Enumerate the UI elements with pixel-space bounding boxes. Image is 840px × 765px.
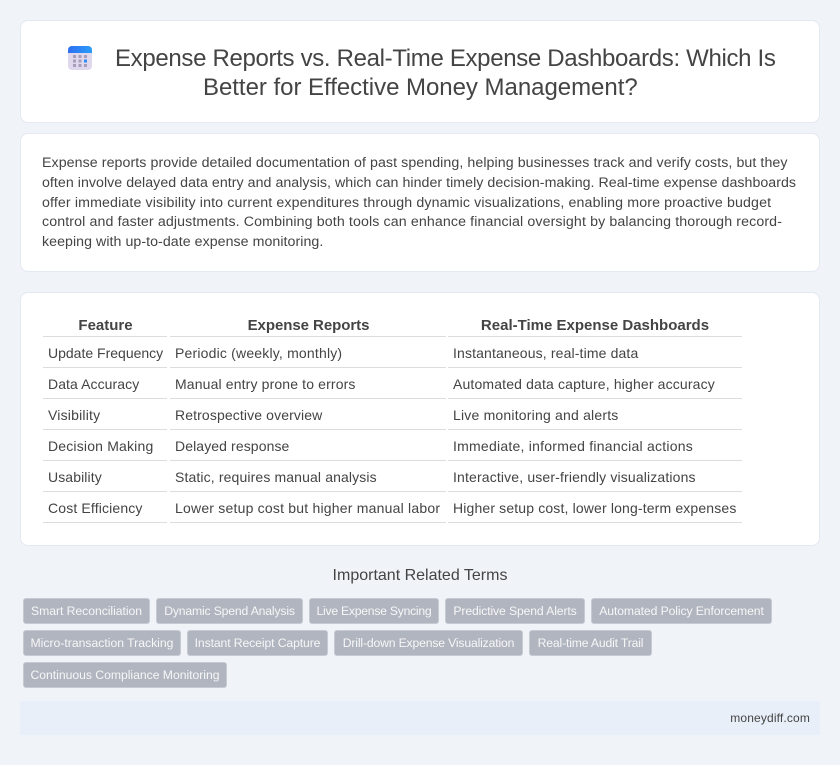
table rows: Lower setup cost but higher manual labor bbox=[175, 500, 440, 516]
footer source: moneydiff.com bbox=[730, 711, 810, 725]
summary text: offer immediate visibility into current expenditures through dynamic visualizations, enabling more proactive budget bbox=[42, 195, 771, 211]
table rows: Higher setup cost, lower long-term expenses bbox=[453, 500, 736, 516]
table rows: Cost Efficiency bbox=[48, 500, 143, 516]
table rows: Delayed response bbox=[175, 438, 289, 454]
table header: Expense Reports bbox=[248, 317, 369, 334]
table rows: Periodic (weekly, monthly) bbox=[175, 345, 342, 361]
related terms tags: Dynamic Spend Analysis bbox=[164, 604, 295, 618]
related terms heading: Important Related Terms bbox=[333, 567, 507, 584]
table rows: Static, requires manual analysis bbox=[175, 469, 377, 485]
summary text bbox=[42, 155, 796, 250]
panel: summary bbox=[20, 133, 820, 272]
related terms tags: Drill-down Expense Visualization bbox=[343, 636, 514, 650]
table rows: Visibility bbox=[48, 407, 100, 423]
related terms tags: Continuous Compliance Monitoring bbox=[30, 668, 220, 682]
related terms tags: Micro-transaction Tracking bbox=[31, 636, 173, 650]
table rows: Decision Making bbox=[48, 438, 153, 454]
related terms tags: Instant Receipt Capture bbox=[195, 636, 320, 650]
footer bar bbox=[20, 701, 820, 735]
title: Better for Effective Money Management? bbox=[203, 74, 638, 101]
table header bbox=[78, 317, 709, 334]
table rows bbox=[43, 336, 742, 523]
table rows: Data Accuracy bbox=[48, 376, 139, 392]
related terms tags: Real-time Audit Trail bbox=[538, 636, 643, 650]
table rows: Automated data capture, higher accuracy bbox=[453, 376, 715, 392]
table header: Real-Time Expense Dashboards bbox=[481, 317, 709, 334]
table header: Feature bbox=[78, 317, 133, 334]
table rows: Live monitoring and alerts bbox=[453, 407, 619, 423]
related terms tags: Predictive Spend Alerts bbox=[453, 604, 577, 618]
title: Expense Reports vs. Real-Time Expense Dashboards: Which Is bbox=[115, 45, 776, 72]
summary text: control and faster adjustments. Combining both tools can enhance financial oversight by balancing thorough record- bbox=[42, 214, 782, 230]
table rows: Usability bbox=[48, 469, 102, 485]
related terms tags: Smart Reconciliation bbox=[31, 604, 142, 618]
table rows: Manual entry prone to errors bbox=[175, 376, 356, 392]
related terms tags: Live Expense Syncing bbox=[317, 604, 431, 618]
table rows: Instantaneous, real-time data bbox=[453, 345, 638, 361]
title panel bbox=[20, 20, 820, 123]
related terms tags: Automated Policy Enforcement bbox=[599, 604, 764, 618]
icon: calendar bbox=[68, 46, 92, 70]
summary text: often involve delayed data entry and analysis, which can hinder timely decision-making. Real-time expense dashboards bbox=[42, 175, 796, 191]
table rows: Immediate, informed financial actions bbox=[453, 438, 693, 454]
table rows: Retrospective overview bbox=[175, 407, 322, 423]
panel: comparison table bbox=[20, 292, 820, 546]
table rows: Interactive, user-friendly visualizations bbox=[453, 469, 696, 485]
summary text: Expense reports provide detailed documentation of past spending, helping businesses track and verify costs, but they bbox=[42, 155, 788, 171]
summary text: keeping with up-to-date expense monitoring. bbox=[42, 234, 323, 250]
title bbox=[115, 45, 776, 101]
related terms tags bbox=[23, 598, 772, 688]
table rows: Update Frequency bbox=[48, 345, 163, 361]
